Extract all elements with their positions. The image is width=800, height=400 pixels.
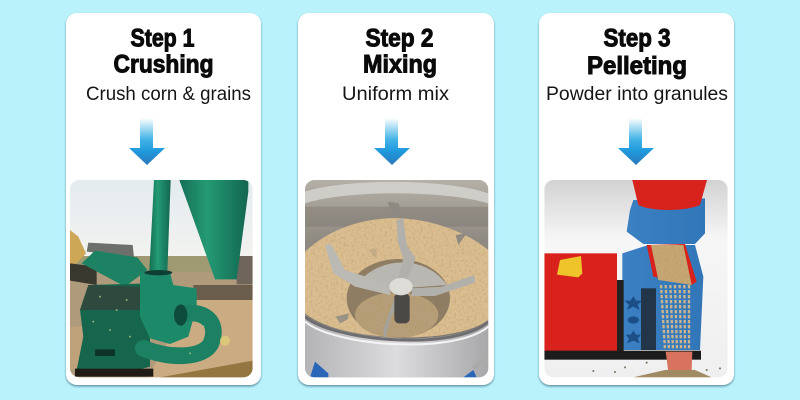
curved duct xyxy=(143,313,213,356)
feed powder xyxy=(305,218,488,337)
blue stars xyxy=(624,296,642,343)
bowl rim and outer wall xyxy=(305,315,488,377)
inner bowl xyxy=(347,259,450,338)
card 1 xyxy=(66,13,261,385)
chute xyxy=(647,244,697,285)
dark base xyxy=(544,351,701,360)
red box xyxy=(544,253,617,352)
panel: step 1 crushing xyxy=(66,13,261,385)
description: uniform mix: Uniform mix xyxy=(342,84,450,105)
arrow 3 xyxy=(618,118,654,165)
description: powder into granules: Powder into granules xyxy=(546,84,728,105)
blue collar xyxy=(627,198,705,244)
panel: step 2 mixing xyxy=(298,13,494,385)
heading: step 2: Step 2 xyxy=(366,24,434,52)
photo: green hammer mill crusher xyxy=(70,180,253,378)
photo: stainless steel mixer with feed powder xyxy=(305,180,488,377)
red hopper xyxy=(632,180,707,210)
arrow 1 xyxy=(129,118,165,165)
crusher body xyxy=(77,283,150,372)
cyclone xyxy=(179,180,248,279)
hopper xyxy=(87,243,134,257)
description: crush corn and grains: Crush corn & grains xyxy=(86,84,251,105)
blades xyxy=(388,202,400,207)
panel: step 3 pelleting xyxy=(539,13,734,385)
card 2 xyxy=(298,13,494,385)
heading: step 1: Step 1 xyxy=(130,24,195,52)
falling pellets xyxy=(661,285,689,350)
blue base xyxy=(310,362,328,377)
heading: pelleting: Pelleting xyxy=(587,52,687,80)
blue body xyxy=(622,245,703,350)
heading: step 3: Step 3 xyxy=(604,24,670,52)
heading: crushing: Crushing xyxy=(114,50,214,78)
arrow 2 xyxy=(374,118,410,165)
photo: pellet machine with red hopper xyxy=(544,180,728,377)
vertical pipe xyxy=(149,180,171,272)
outlet and pellet pile xyxy=(666,352,692,372)
heading: mixing: Mixing xyxy=(363,50,437,78)
card 3 xyxy=(539,13,734,385)
